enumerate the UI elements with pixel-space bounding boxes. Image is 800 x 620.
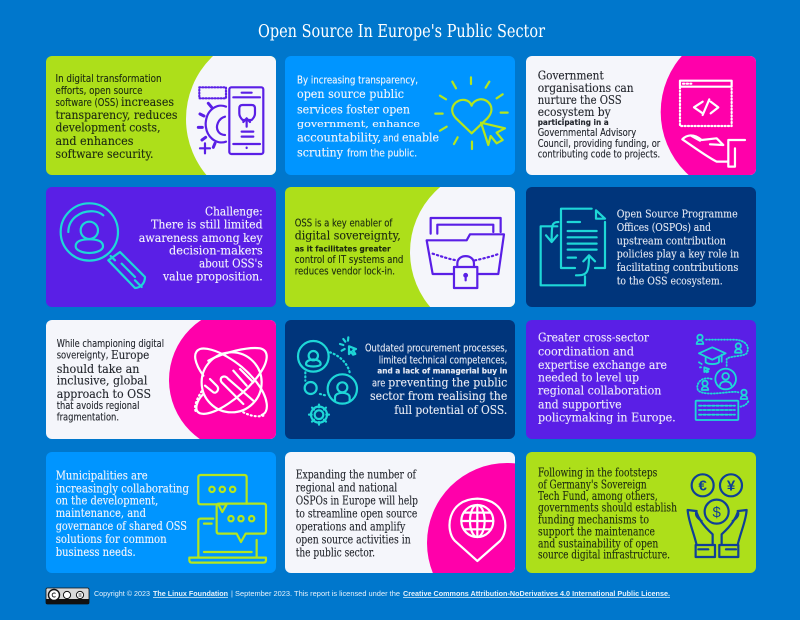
- icon: hands with coins: [688, 474, 747, 557]
- text: cross-sector coordination: policymaking in Europe.: [538, 409, 676, 424]
- text: municipalities: increasingly collaborating: [56, 481, 189, 496]
- panel: municipalities: [46, 452, 276, 573]
- text: expanding OSPOs: OSPOs in Europe will help: [296, 492, 418, 507]
- icon: locked folder: [427, 218, 504, 288]
- text: procurement barriers: and a lack of managerial buy in: [377, 366, 507, 375]
- text: transparency: By increasing transparency,: [297, 74, 418, 86]
- date and licence statement: | September 2023. This report is licensed under the: [231, 589, 400, 598]
- text: municipalities: on the development,: [56, 493, 158, 508]
- link: The Linux Foundation: The Linux Foundation: [153, 589, 228, 598]
- text: challenge: There is still limited: [151, 217, 263, 232]
- icon: globe with orbits: [195, 348, 267, 416]
- text: inclusive Europe: While championing digital: [57, 338, 164, 350]
- icon: network, cap and keyboard: [696, 335, 748, 420]
- text: digital transformation: In digital transformation: [56, 73, 162, 85]
- icon: documents with arrows: [541, 209, 605, 285]
- text: procurement barriers: Outdated procurement processes,: [365, 343, 507, 355]
- text: cross-sector coordination: Greater cross-sector: [538, 330, 649, 345]
- panel: nurture the ecosystem: [526, 56, 756, 175]
- text: inclusive Europe: that avoids regional: [57, 400, 139, 412]
- text: procurement barriers: sector from realising the: [370, 388, 507, 403]
- text: funding mechanisms: Tech Fund, among others,: [538, 488, 658, 503]
- text: challenge: about OSS's: [199, 256, 263, 271]
- text: nurture the ecosystem: contributing code to projects.: [538, 148, 660, 160]
- text: funding mechanisms: and sustainability of open: [538, 535, 658, 550]
- panel: digital sovereignty: [285, 187, 515, 307]
- text: digital transformation: increases: [121, 94, 174, 109]
- footer: licence: [46, 588, 670, 604]
- text: funding mechanisms: support the maintenance: [538, 523, 655, 538]
- icon: magnifier with person: [61, 203, 145, 288]
- text: cross-sector coordination: expertise exchange are: [538, 357, 667, 372]
- icon: cc badge: [46, 588, 89, 604]
- text: nurture the ecosystem: Government: [538, 68, 604, 82]
- text: expanding OSPOs: regional and national: [296, 480, 397, 495]
- text: funding mechanisms: of Germany's Sovereign: [538, 476, 647, 491]
- text: cross-sector coordination: regional collaboration: [538, 383, 661, 398]
- text: digital sovereignty: reduces vendor lock-in.: [295, 265, 395, 277]
- text: cross-sector coordination: needed to level up: [538, 369, 639, 384]
- text: OSPOs: upstream contribution: [617, 233, 726, 247]
- text: procurement barriers: full potential of OSS.: [394, 402, 507, 417]
- text: challenge: decision-makers: [169, 243, 263, 258]
- text: cross-sector coordination: coordination and: [538, 343, 634, 358]
- panel: OSPOs: [526, 187, 756, 307]
- text: digital sovereignty: control of IT systems and: [295, 254, 403, 266]
- text: challenge: [139, 204, 264, 283]
- text: procurement barriers: preventing the public: [388, 375, 507, 390]
- icon: location pin with globe: [450, 499, 505, 561]
- text: procurement barriers: limited technical competences,: [379, 354, 507, 366]
- text: nurture the ecosystem: [538, 68, 661, 160]
- text: transparency: open source public: [297, 86, 404, 101]
- text: nurture the ecosystem: Council, providing funding, or: [538, 138, 661, 150]
- icon: phone and gear: [198, 87, 263, 154]
- text: inclusive Europe: fragmentation.: [57, 412, 119, 424]
- title: Open Source In Europe's Public Sector: [258, 22, 546, 42]
- text: municipalities: business needs.: [56, 544, 136, 559]
- dollar glyph: $: [713, 504, 722, 521]
- link: licence: Creative Commons Attribution-NoDerivatives 4.0 International Public License.: [403, 589, 670, 598]
- text: digital transformation: and enhances: [56, 133, 134, 148]
- text: inclusive Europe: approach to OSS: [57, 386, 151, 401]
- panel: cross-sector coordination: [526, 320, 756, 439]
- panel: inclusive Europe: [46, 320, 276, 439]
- text: inclusive Europe: Europe: [111, 347, 149, 362]
- text: funding mechanisms: funding mechanisms to: [538, 511, 649, 526]
- text: OSPOs: Open Source Programme: [617, 207, 738, 221]
- text: OSPOs: Offices (OSPOs) and: [617, 220, 711, 234]
- text: OSPOs: to the OSS ecosystem.: [617, 273, 723, 287]
- text: digital sovereignty: [295, 218, 403, 277]
- text: nurture the ecosystem: nurture the OSS: [538, 92, 622, 107]
- yen glyph: ¥: [727, 478, 736, 494]
- text: transparency: services foster open: [297, 102, 410, 116]
- text: digital transformation: transparency, reduces: [56, 107, 178, 122]
- text: municipalities: Municipalities are: [56, 467, 148, 482]
- text: digital transformation: development costs,: [56, 120, 160, 134]
- text: expanding OSPOs: Expanding the number of: [296, 466, 417, 481]
- text: expanding OSPOs: open source activities in: [296, 532, 411, 547]
- text: transparency: [297, 74, 439, 160]
- text: transparency: government, enhance: [297, 119, 420, 130]
- text: transparency: enable: [402, 130, 439, 144]
- text: digital transformation: [56, 73, 178, 161]
- text: nurture the ecosystem: Governmental Advisory: [538, 127, 636, 139]
- text: OSPOs: policies play a key role in: [617, 247, 740, 261]
- text: nurture the ecosystem: ecosystem by: [538, 104, 611, 119]
- text: municipalities: maintenance, and: [56, 505, 146, 520]
- text: transparency: scrutiny: [297, 144, 344, 160]
- text: transparency: from the public.: [347, 148, 417, 160]
- panel: challenge: [46, 187, 276, 307]
- text: expanding OSPOs: [296, 466, 418, 560]
- panel: transparency: [285, 56, 515, 175]
- text: inclusive Europe: sovereignty,: [57, 350, 108, 362]
- text: digital sovereignty: OSS is a key enabler of: [295, 218, 393, 230]
- text: challenge: Challenge:: [205, 204, 263, 218]
- text: funding mechanisms: governments should establish: [538, 500, 677, 515]
- icon: connected people and gear: [298, 337, 357, 425]
- copyright text: Copyright © 2023: [94, 589, 150, 598]
- text: digital sovereignty: digital sovereignty,: [295, 227, 401, 242]
- text: expanding OSPOs: to streamline open source: [296, 505, 417, 520]
- text: nurture the ecosystem: participating in a: [538, 118, 609, 127]
- text: challenge: value proposition.: [162, 268, 263, 283]
- panel: digital transformation: [46, 56, 276, 175]
- text: funding mechanisms: Following in the footsteps: [538, 465, 657, 480]
- euro glyph: €: [699, 478, 708, 494]
- text: funding mechanisms: source digital infrastructure.: [538, 547, 670, 562]
- text: cross-sector coordination: and supportive: [538, 397, 622, 412]
- text: OSPOs: [617, 207, 740, 287]
- text: cross-sector coordination: [538, 330, 676, 424]
- text: procurement barriers: [365, 343, 507, 417]
- text: municipalities: solutions for common: [56, 531, 167, 546]
- panel: expanding OSPOs: [285, 452, 515, 573]
- text: inclusive Europe: should take an: [57, 361, 139, 376]
- panel: procurement barriers: [285, 320, 515, 439]
- text: inclusive Europe: [57, 338, 164, 424]
- text: transparency: accountability,: [297, 130, 381, 144]
- text: inclusive Europe: inclusive, global: [57, 373, 147, 388]
- text: digital sovereignty: as it facilitates greater: [295, 244, 391, 253]
- text: digital transformation: software security.: [56, 146, 154, 161]
- panel: funding mechanisms: [526, 452, 756, 573]
- text: challenge: awareness among key: [139, 230, 264, 245]
- icon: code in hand: [680, 81, 745, 167]
- text: funding mechanisms: [538, 465, 677, 562]
- text: OSPOs: facilitating contributions: [617, 260, 738, 274]
- text: expanding OSPOs: the public sector.: [296, 545, 375, 560]
- icon: laptop and chat bubbles: [189, 475, 266, 563]
- text: municipalities: [56, 467, 189, 559]
- text: transparency: and: [383, 132, 399, 144]
- text: nurture the ecosystem: organisations can: [538, 80, 634, 95]
- text: digital transformation: efforts, open source: [56, 85, 142, 97]
- text: digital transformation: software (OSS): [56, 97, 118, 109]
- text: expanding OSPOs: operations and amplify: [296, 519, 406, 534]
- text: municipalities: governance of shared OSS: [56, 518, 187, 533]
- text: procurement barriers: are: [372, 378, 385, 390]
- icon: heart and cursor: [435, 77, 508, 149]
